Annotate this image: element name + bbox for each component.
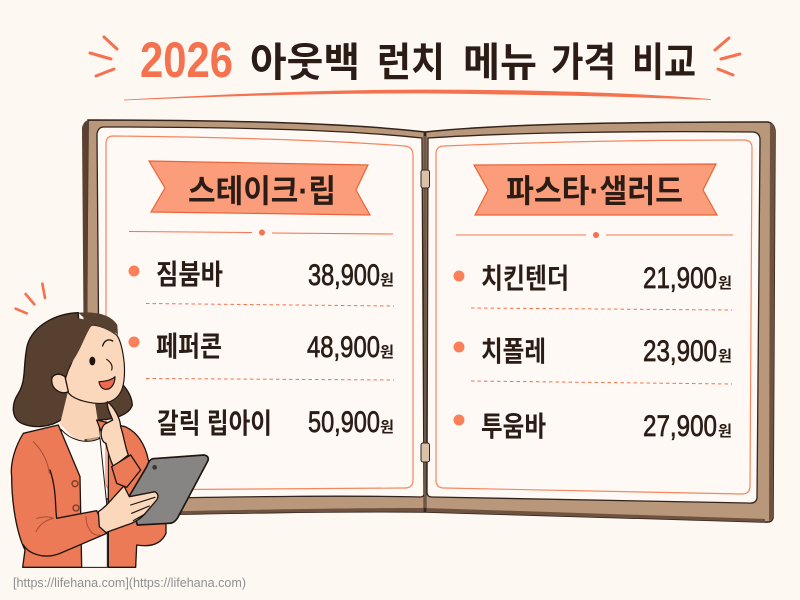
panel: steak and ribs menu — [128, 161, 394, 439]
cardigan buttons — [72, 481, 79, 511]
hair right side — [95, 383, 132, 420]
bottom hinge — [421, 443, 430, 462]
title: 2026 — [140, 32, 233, 88]
row: 투움바: 원 — [718, 423, 732, 440]
eyebrow — [103, 340, 113, 346]
row: 치킨텐더: 치킨텐더 — [481, 263, 569, 294]
hair back — [13, 313, 80, 427]
row: 갈릭 립아이: 원 — [380, 419, 394, 436]
row: 짐붐바: 원 — [380, 272, 394, 289]
row: 페퍼콘: 원 — [380, 344, 394, 361]
row: 투움바 — [454, 410, 732, 443]
row divider — [471, 308, 732, 310]
title: 런치 — [377, 41, 445, 85]
top hinge — [421, 170, 430, 188]
left cover shade — [82, 120, 88, 516]
bottom cover shade — [85, 508, 765, 522]
title underline — [124, 90, 711, 100]
eye — [89, 357, 95, 365]
panel: pasta and salad menu — [454, 164, 733, 443]
cardigan left body — [11, 425, 82, 567]
right sleeve cuff — [112, 455, 141, 487]
row: 치폴레 — [454, 335, 732, 368]
banner: pasta and salad: 파스타·샐러드 — [506, 173, 683, 209]
white shirt — [61, 429, 107, 567]
title: 비교 — [632, 41, 696, 85]
tablet — [129, 455, 208, 525]
row: 치폴레: 치폴레 — [481, 336, 546, 367]
row divider — [146, 378, 394, 380]
ear — [52, 374, 68, 393]
row: 투움바: 27,900 — [643, 410, 717, 443]
sleeve folds — [33, 442, 100, 535]
right cover shade — [769, 123, 775, 521]
row: 갈릭 립아이 — [157, 406, 394, 439]
row: 치킨텐더: 21,900 — [643, 262, 717, 295]
banner: pasta and salad — [474, 164, 717, 215]
tablet camera — [152, 465, 157, 470]
row divider — [146, 304, 394, 306]
title: 아웃백 — [250, 41, 360, 85]
banner: steak and ribs — [149, 161, 370, 215]
title: 메뉴 — [463, 41, 537, 85]
nose — [107, 359, 112, 370]
cardigan right body — [97, 420, 166, 567]
right page orange border — [436, 140, 752, 494]
row: 갈릭 립아이: 갈릭 립아이 — [157, 408, 272, 439]
idea rays — [16, 284, 45, 313]
hair fringe — [40, 312, 118, 375]
row: 페퍼콘 — [128, 331, 394, 364]
row: 치킨텐더 — [454, 262, 732, 295]
row: 투움바: 투움바 — [481, 411, 546, 442]
row: 짐붐바: 짐붐바 — [156, 259, 223, 290]
left page orange border — [106, 136, 413, 490]
finger lines — [131, 497, 155, 521]
row: 치폴레: 23,900 — [643, 335, 717, 368]
book cover — [85, 120, 775, 522]
icon: left title sparkle — [90, 37, 117, 76]
left page — [97, 127, 424, 499]
row divider — [471, 381, 732, 384]
row: 짐붐바: 38,900 — [308, 259, 380, 292]
mouth — [99, 377, 115, 389]
holding hand — [98, 486, 158, 533]
divider — [129, 230, 393, 236]
neck — [60, 390, 100, 441]
icon: right title sparkle — [715, 38, 740, 75]
row: 갈릭 립아이: 50,900 — [308, 406, 380, 439]
row: 페퍼콘: 페퍼콘 — [156, 331, 222, 362]
divider — [456, 232, 733, 238]
row: 치폴레: 원 — [718, 348, 732, 365]
title — [140, 32, 696, 88]
finger hand — [101, 402, 128, 467]
title: 가격 — [551, 41, 616, 85]
banner: steak and ribs: 스테이크·립 — [188, 173, 336, 209]
right page — [427, 132, 760, 503]
source url: [https://lifehana.com](https://lifehana.com) — [13, 576, 246, 590]
row: 짐붐바 — [128, 259, 394, 292]
spine — [424, 132, 426, 512]
face — [65, 325, 124, 403]
panel: open menu book — [82, 120, 775, 522]
illustration: woman with tablet — [11, 284, 208, 567]
row: 치킨텐더: 원 — [718, 275, 732, 292]
row: 페퍼콘: 48,900 — [307, 331, 380, 364]
left sleeve — [23, 470, 107, 556]
